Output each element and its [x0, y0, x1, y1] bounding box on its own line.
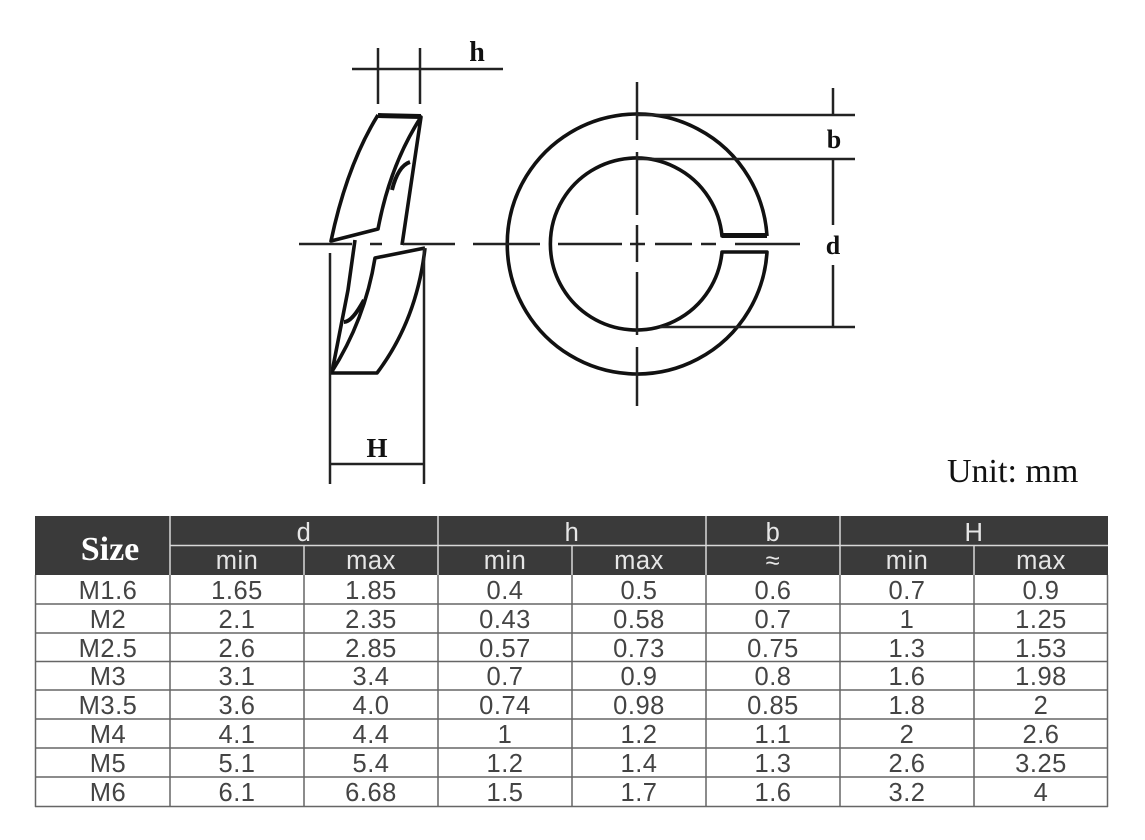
row M1.6: 0.4 [487, 577, 523, 605]
row M4 [90, 721, 1059, 749]
row M5: 1.2 [487, 750, 523, 778]
row M4: 1.1 [755, 721, 791, 749]
row M3.5: 4.0 [353, 692, 389, 720]
unit label: Unit: mm [947, 453, 1078, 490]
row M6: 1.7 [621, 779, 657, 807]
row M5: 1.3 [755, 750, 791, 778]
row M2.5: 2.85 [345, 635, 397, 663]
dimension h: h [469, 37, 485, 68]
dimension h [352, 37, 503, 104]
table header: min [216, 547, 258, 575]
table header: max [1016, 547, 1066, 575]
table header: h [565, 519, 579, 547]
row M2.5: 0.57 [479, 635, 531, 663]
table header: Size [81, 531, 139, 568]
row M2.5: 2.6 [219, 635, 255, 663]
row M1.6: 0.7 [889, 577, 925, 605]
row M5: 3.25 [1015, 750, 1067, 778]
row M2: 0.7 [755, 606, 791, 634]
row M3: 1.6 [889, 663, 925, 691]
table header: d [297, 519, 311, 547]
row M5 [90, 750, 1067, 778]
table header: min [886, 547, 928, 575]
row M1.6: 0.9 [1023, 577, 1059, 605]
dimension H [330, 248, 424, 484]
row M3.5: 2 [1034, 692, 1048, 720]
table header: H [965, 519, 983, 547]
row M1.6: 1.65 [211, 577, 263, 605]
row M4: 4.1 [219, 721, 255, 749]
row M2.5: 1.3 [889, 635, 925, 663]
row M2: 2.35 [345, 606, 397, 634]
row M2: M2 [90, 606, 126, 634]
row M3.5: 3.6 [219, 692, 255, 720]
row M1.6: 0.5 [621, 577, 657, 605]
dimension H: H [366, 433, 388, 463]
dimension b [637, 88, 855, 159]
row M2.5 [79, 635, 1067, 663]
dimension d: d [826, 231, 841, 260]
dimension d [660, 160, 855, 327]
row M6: 6.1 [219, 779, 255, 807]
row M4: 4.4 [353, 721, 389, 749]
row M4: 1 [498, 721, 512, 749]
table header: ≈ [766, 547, 780, 575]
row M4: 2.6 [1023, 721, 1059, 749]
row M2: 0.58 [613, 606, 665, 634]
table header: min [484, 547, 526, 575]
row M3: 3.4 [353, 663, 389, 691]
ring split lip [722, 233, 767, 238]
row M3.5: 1.8 [889, 692, 925, 720]
row M2.5: 0.73 [613, 635, 665, 663]
row M3.5: 0.98 [613, 692, 665, 720]
row M2.5: 0.75 [747, 635, 799, 663]
row M6: M6 [90, 779, 126, 807]
row M3: 0.8 [755, 663, 791, 691]
row M4: 1.2 [621, 721, 657, 749]
upper half of split washer side profile [331, 115, 421, 245]
row M2.5: 1.53 [1015, 635, 1067, 663]
table header: max [614, 547, 664, 575]
row M3: 0.9 [621, 663, 657, 691]
dimension b: b [827, 125, 841, 154]
row M3: 1.98 [1015, 663, 1067, 691]
row M6: 4 [1034, 779, 1048, 807]
washer ring [507, 114, 767, 374]
row M6: 1.6 [755, 779, 791, 807]
row M4: M4 [90, 721, 126, 749]
row M1.6: 1.85 [345, 577, 397, 605]
diagram: washer front view [473, 82, 855, 406]
row M1.6: M1.6 [79, 577, 137, 605]
row M3.5: 0.85 [747, 692, 799, 720]
row M3.5 [79, 692, 1048, 720]
table header: max [346, 547, 396, 575]
side view center line [299, 243, 455, 245]
row M1.6 [79, 577, 1059, 605]
center lines [473, 82, 800, 406]
row M6: 3.2 [889, 779, 925, 807]
row M5: 1.4 [621, 750, 657, 778]
row M3: 0.7 [487, 663, 523, 691]
row M2: 1.25 [1015, 606, 1067, 634]
dimensions table [35, 516, 1108, 807]
row M3 [90, 663, 1067, 691]
row M3.5: M3.5 [79, 692, 137, 720]
row M2: 1 [900, 606, 914, 634]
table header [35, 516, 1108, 575]
row M4: 2 [900, 721, 914, 749]
row M2.5: M2.5 [79, 635, 137, 663]
row M6: 6.68 [345, 779, 397, 807]
row M5: M5 [90, 750, 126, 778]
table grid [35, 575, 1108, 807]
lower half of split washer side profile [331, 240, 425, 373]
row M2 [90, 606, 1067, 634]
diagram: washer side view [299, 37, 503, 484]
row M1.6: 0.6 [755, 577, 791, 605]
row M5: 5.1 [219, 750, 255, 778]
table header: b [766, 519, 780, 547]
row M6 [90, 779, 1048, 807]
row M5: 2.6 [889, 750, 925, 778]
row M3.5: 0.74 [479, 692, 531, 720]
row M3: M3 [90, 663, 126, 691]
row M6: 1.5 [487, 779, 523, 807]
row M3: 3.1 [219, 663, 255, 691]
row M2: 0.43 [479, 606, 531, 634]
row M2: 2.1 [219, 606, 255, 634]
row M5: 5.4 [353, 750, 389, 778]
